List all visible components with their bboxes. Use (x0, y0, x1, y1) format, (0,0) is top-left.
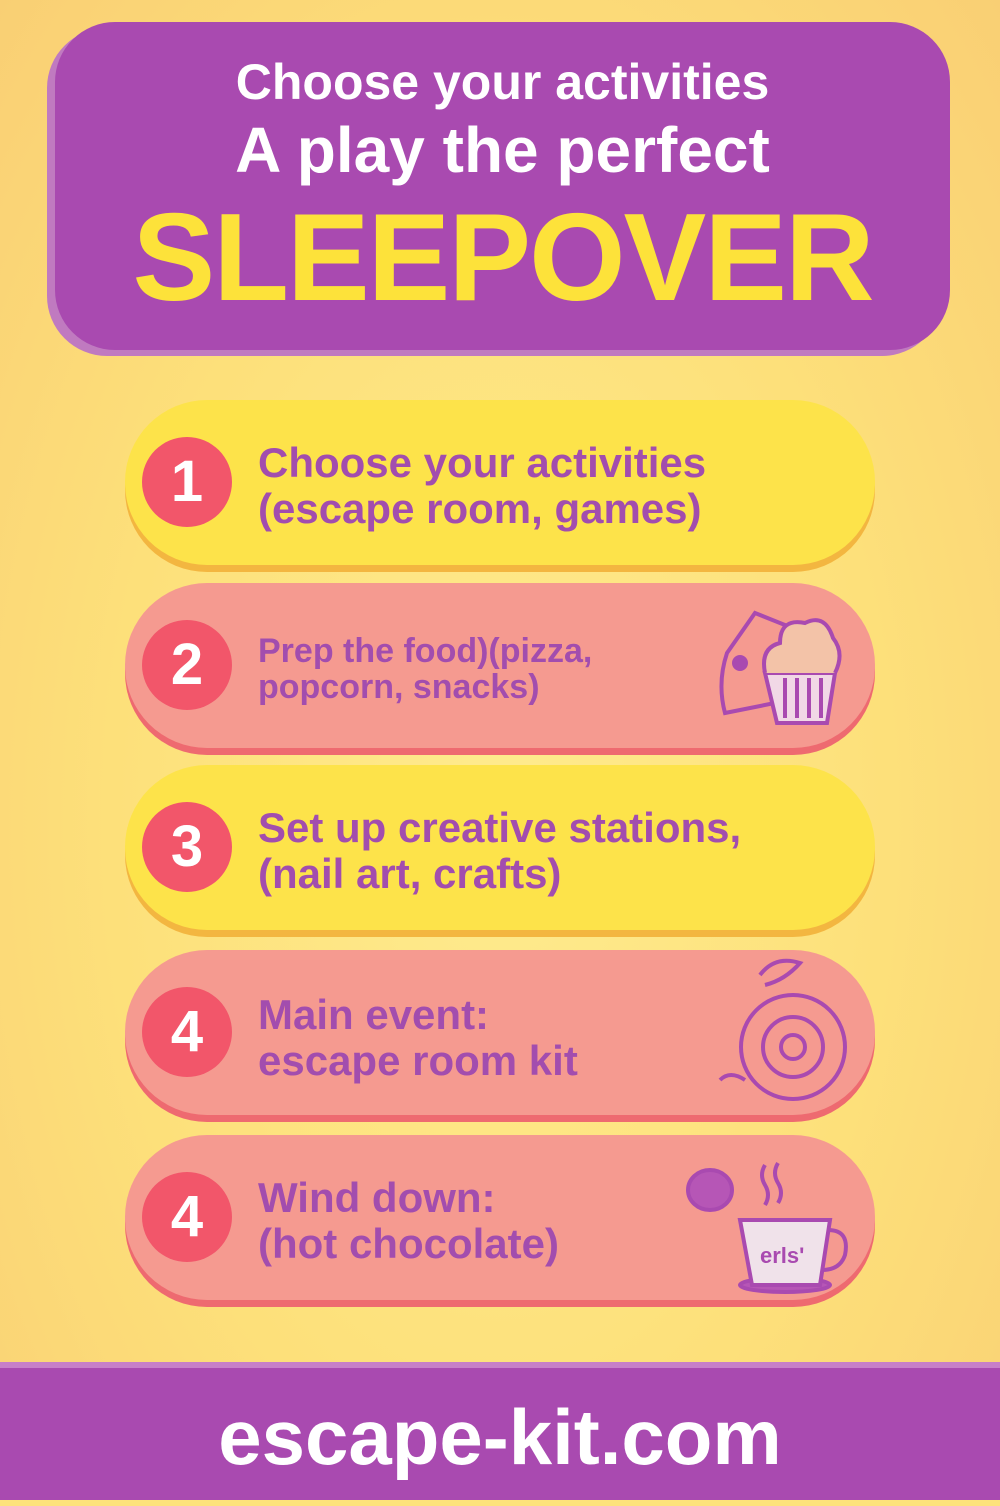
icon: escape room dial (718, 958, 847, 1101)
step 2 text: popcorn, snacks) (258, 668, 540, 706)
step 5 text (258, 1174, 559, 1267)
footer: escape-kit.com (218, 1393, 782, 1481)
step 2 text: Prep the food)(pizza, (258, 632, 592, 670)
step 2 text (258, 632, 592, 706)
step 1 text: Choose your activities (258, 439, 706, 486)
icon: popcorn and controller (719, 610, 842, 725)
step 5 text: (hot chocolate) (258, 1220, 559, 1267)
step 3 text: Set up creative stations, (258, 804, 741, 851)
step 1 text: (escape room, games) (258, 485, 702, 532)
number 4 (142, 987, 232, 1077)
number 4 (second) (142, 1172, 232, 1262)
title SLEEPOVER: SLEEPOVER (132, 189, 872, 327)
number 1: 1 (171, 449, 203, 514)
number 4 (second): 4 (171, 1184, 203, 1249)
footer (0, 1362, 1000, 1500)
header panel (55, 22, 950, 350)
step 4 text: Main event: (258, 991, 489, 1038)
step 3 (125, 765, 875, 930)
step 3 text: (nail art, crafts) (258, 850, 561, 897)
number 2 (142, 620, 232, 710)
number 4: 4 (171, 999, 203, 1064)
step 5 text: Wind down: (258, 1174, 496, 1221)
step 4 text (258, 991, 578, 1084)
step 1 text (258, 439, 706, 532)
step 5 (125, 1135, 875, 1300)
title line 1: Choose your activities (236, 54, 769, 110)
icon: hot chocolate mug (686, 1162, 848, 1294)
title line 2: A play the perfect (235, 114, 770, 186)
number 3: 3 (171, 814, 203, 879)
icon: hot chocolate mug: erls' (760, 1243, 804, 1268)
number 1 (142, 437, 232, 527)
step 4 text: escape room kit (258, 1037, 578, 1084)
step 2 (125, 583, 875, 748)
number 2: 2 (171, 632, 203, 697)
step 1 (125, 400, 875, 565)
step 3 text (258, 804, 741, 897)
number 3 (142, 802, 232, 892)
step 4 (125, 950, 875, 1115)
